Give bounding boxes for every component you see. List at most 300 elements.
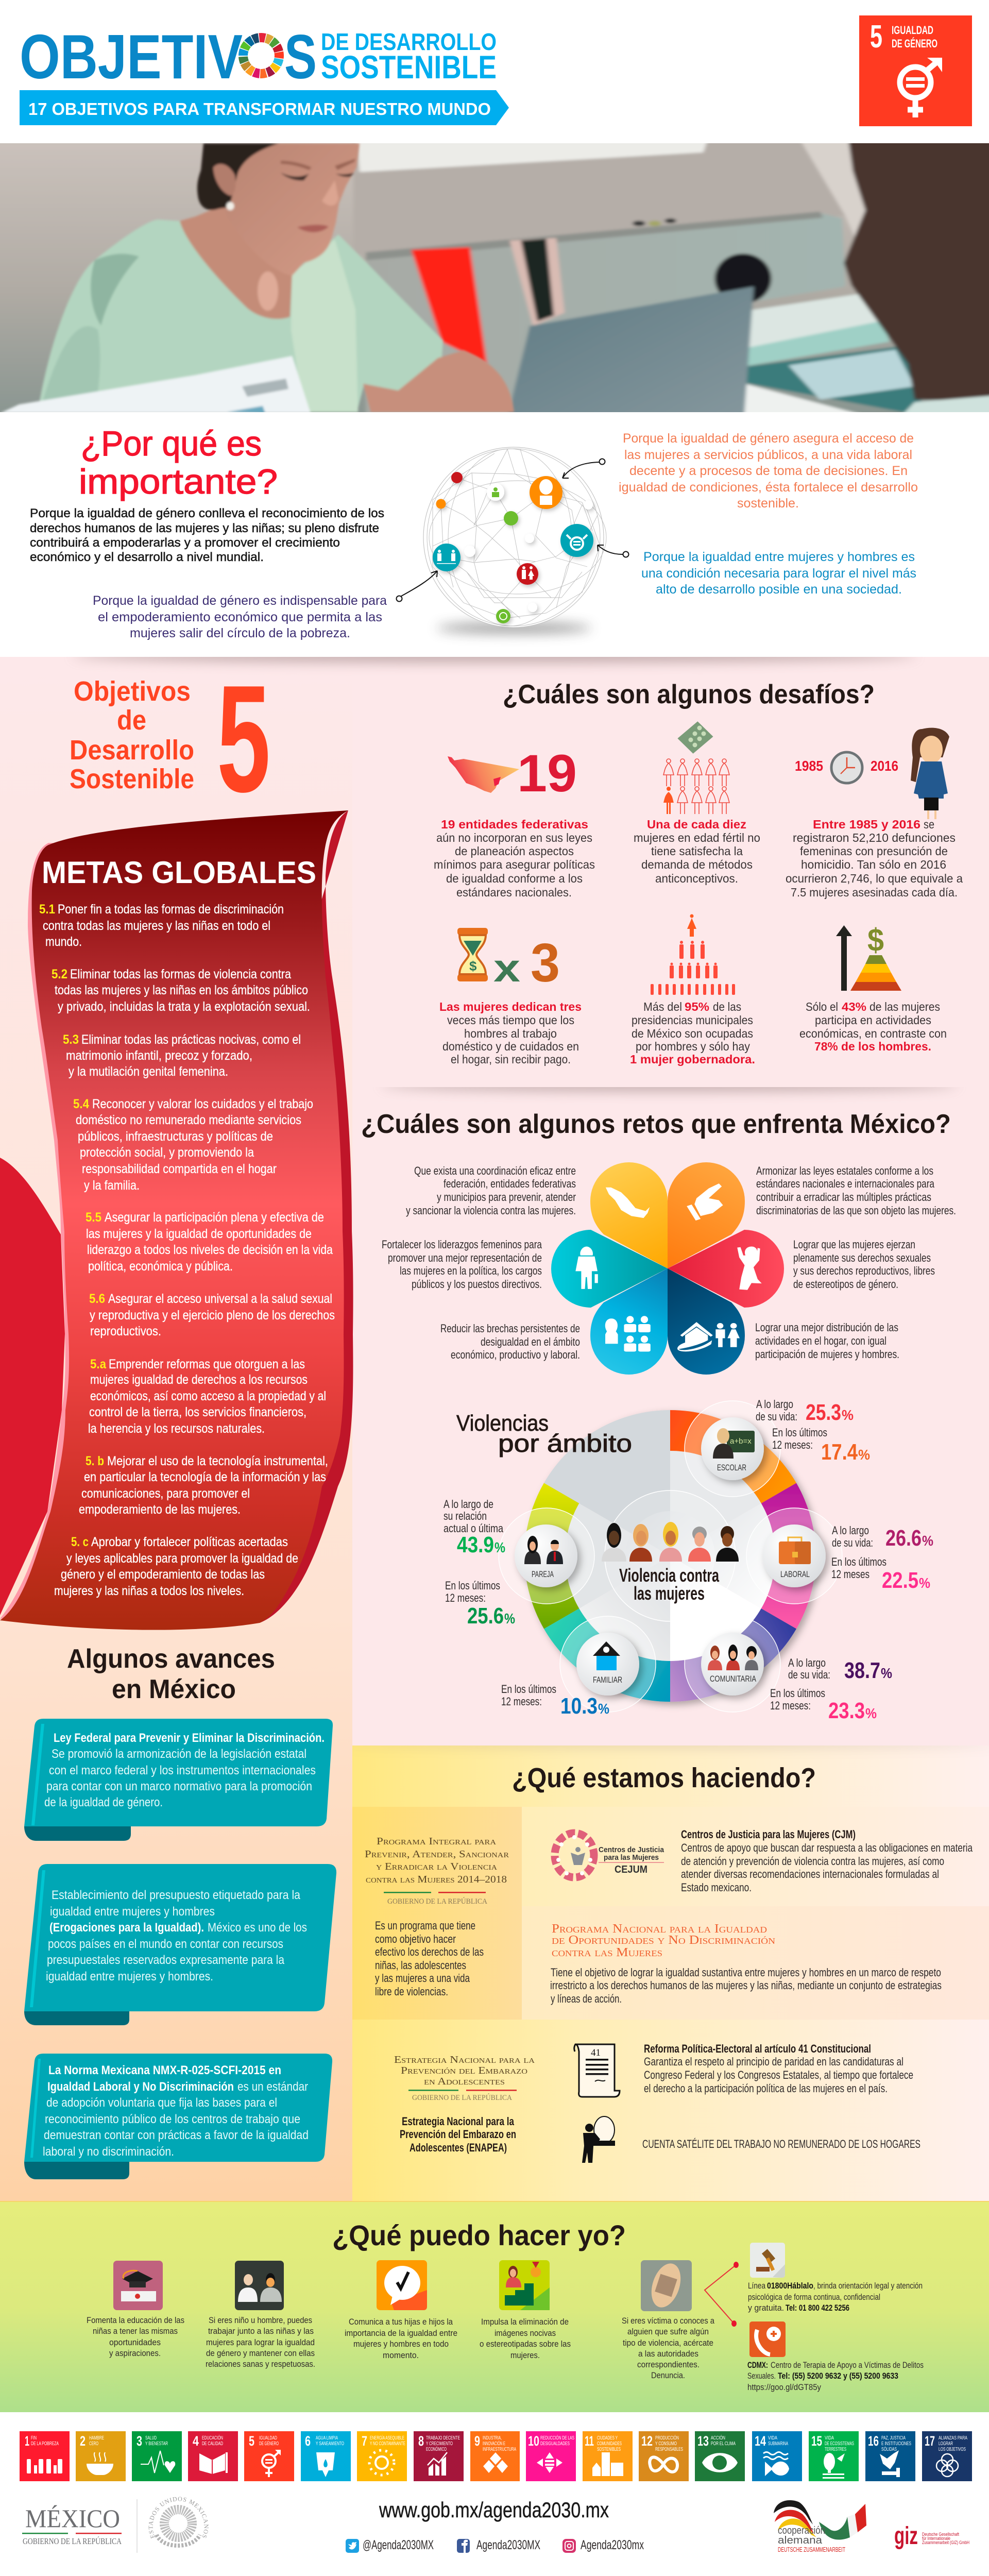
text: meta 5.1: contra todas las mujeres y las niñas en todo el (43, 919, 270, 933)
panel: Norma Mexicana: La Norma Mexicana NMX-R-025-SCFI-2015 en (48, 2063, 281, 2077)
text: meta 5.a: Emprender reformas que otorguen a las (109, 1357, 305, 1371)
tile 11 (583, 2431, 633, 2481)
icon: escudo nacional: ESTADOS UNIDOS MEXICANOS (148, 2497, 208, 2539)
tile 4: 4 (193, 2433, 199, 2449)
tile 1: 1 (25, 2433, 29, 2449)
text: entre 1985 y 2016: femeninas con presunción de (800, 844, 948, 858)
text: entre 1985 y 2016: Entre 1985 y 2016 (813, 818, 920, 831)
section: ¿Qué puedo hacer yo? (0, 2201, 989, 2412)
node: COMUNITARIA (685, 1616, 780, 1712)
tile 11: 11 (585, 2433, 594, 2449)
arrow: purple callout (397, 571, 437, 602)
text: meta 5.3: matrimonio infantil, precoz y forzado, (66, 1048, 252, 1063)
text: una de cada diez: Una de cada diez (647, 818, 746, 831)
text: fomenta educación: y aspiraciones. (109, 2348, 161, 2358)
text: brechas persistentes: económico, productivo y laboral. (451, 1348, 580, 1361)
tile 14: VIDA (768, 2435, 777, 2441)
text: comunica: importancia de la igualdad entre (345, 2328, 457, 2338)
text: liderazgos femeninos: públicos y los puestos directivos. (412, 1278, 542, 1291)
text block: acceso a servicios: las mujeres a servicios públicos, a una vida laboral (624, 448, 912, 462)
logo: cooperación alemana: cooperación (778, 2525, 825, 2536)
text: línea 01800: 01800Háblalo (767, 2281, 813, 2291)
icon: reloj de arena x 3: $ (469, 958, 477, 974)
text: 43% de las mujeres (799, 1000, 947, 1053)
text: armonizar leyes: estándares nacionales e internacionales para (756, 1177, 935, 1190)
tile 8: Y CRECIMIENTO (426, 2441, 453, 2447)
text block: acceso a servicios: sostenible. (737, 496, 799, 511)
tile 14: SUBMARINA (768, 2441, 788, 2447)
stats: laboral: A lo largo (832, 1524, 869, 1537)
panel: programa integral: efectivo los derechos de las (375, 1945, 484, 1958)
panel: Ley Federal: de la igualdad de género. (44, 1795, 163, 1809)
tile 5 (244, 2431, 294, 2481)
text: si eres víctima (622, 2316, 714, 2380)
text: programa nacional igualdad: y líneas de acción. (551, 1992, 622, 2005)
text: meta 5.5: liderazgo a todos los niveles de decisión en la vida (87, 1243, 333, 1257)
text: meta 5.6: y reproductiva y el ejercicio pleno de los derechos (90, 1308, 335, 1323)
icon: reloj de arena x 3 (457, 928, 560, 993)
heading: retos: ¿Cuáles son algunos retos que enfrenta México? (361, 1109, 951, 1139)
heading: violencias por ámbito: Violencias (456, 1411, 549, 1436)
panel: Erogaciones para la Igualdad: (Erogaciones para la Igualdad). (49, 1921, 204, 1935)
tile 9: 9 (474, 2433, 480, 2449)
text: 95% presidencias municipales (630, 1000, 755, 1066)
icon: mazo (750, 2243, 785, 2278)
central circle (605, 1490, 736, 1621)
text: programa nacional igualdad: de Oportunidades y No Discriminación (552, 1934, 775, 1947)
stats: escolar: % (858, 1447, 870, 1463)
text: meta 5.2: todas las mujeres y las niñas en los ámbitos público (55, 983, 308, 997)
panel: programa integral: GOBIERNO DE LA REPÚBLICA (387, 1897, 487, 1906)
icon: pergamino artículo 41 (574, 2044, 620, 2097)
text: 43% de las mujeres: participa en actividades (815, 1013, 931, 1027)
icon: logo CEJUM: para las Mujeres (604, 1853, 659, 1862)
icon: reloj de arena x 3: 3 (531, 933, 560, 993)
text: liderazgos femeninos: Fortalecer los liderazgos femeninos para (382, 1238, 542, 1251)
text: fomenta educación: Fomenta la educación de las (87, 2315, 184, 2325)
icon: logo CEJUM: CEJUM (615, 1864, 647, 1875)
chart: rueda de violencia (499, 1401, 842, 1712)
tile 10: DESIGUALDADES (540, 2441, 570, 2447)
tile 16: E INSTITUCIONES (881, 2441, 911, 2447)
text: línea 01800: , brinda orientación legal y atención (813, 2281, 923, 2291)
text: meta 5.2: Eliminar todas las formas de violencia contra (70, 967, 291, 981)
text: una de cada diez: demanda de métodos (641, 858, 753, 871)
tile 13 (695, 2431, 745, 2481)
text: meta 5.2 (52, 967, 310, 1014)
panel: programa integral: Prevenir, Atender, Sancionar (365, 1849, 509, 1860)
banner: 17 objetivos: 17 OBJETIVOS PARA TRANSFORMAR NUESTRO MUNDO (28, 99, 491, 118)
heading: Algunos avances en México (67, 1644, 275, 1704)
text: 19 entidades: aún no incorporan en sus leyes (436, 831, 592, 844)
tile 2 (76, 2431, 126, 2481)
text block: reconocimiento de derechos (30, 506, 384, 564)
icon: mapa de México con 19: 19 (517, 744, 577, 803)
text: meta 5.b (79, 1454, 328, 1517)
tile 16: SÓLIDAS (881, 2446, 897, 2452)
panel: Norma Mexicana: es un estándar (237, 2080, 308, 2094)
stats: comunitaria: % (865, 1705, 877, 1721)
text: centros de justicia: Centros de Justicia para las Mujeres (CJM) (681, 1828, 856, 1841)
panel: Erogaciones para la Igualdad: pocos países en el mundo en contar con recursos (48, 1937, 283, 1951)
text: programa nacional igualdad: Programa Nacional para la Igualdad (552, 1922, 767, 1936)
text: programa nacional igualdad (550, 1922, 942, 2005)
text: derechos sexuales (793, 1238, 935, 1291)
logo: giz: Deutsche Gesellschaft (922, 2532, 959, 2537)
text: si eres víctima: correspondientes. (637, 2360, 700, 2369)
panel: ENAPEA: Estrategia Nacional para la (394, 2054, 535, 2065)
panel: Norma Mexicana: laboral y no discriminación. (43, 2145, 174, 2159)
icon: mujer saltando (737, 1247, 762, 1290)
row: 17 SDG tiles (20, 2431, 972, 2481)
tile 16 (865, 2431, 915, 2481)
text: meta 5.2: y privado, incluidas la trata y la explotación sexual. (58, 999, 310, 1014)
heading: METAS GLOBALES: METAS GLOBALES (42, 855, 316, 890)
text: línea 01800 (748, 2281, 923, 2313)
tile 8 (414, 2431, 464, 2481)
logo: giz (894, 2522, 969, 2550)
text block: acceso a servicios: decente y a procesos de toma de decisiones. En (629, 464, 908, 478)
icon: SDG 5 tile (859, 15, 972, 126)
header: logo and banner (20, 22, 509, 125)
heading: Objetivos de Desarrollo Sostenible 5: 5 (217, 653, 270, 824)
stats: comunitaria (770, 1656, 892, 1723)
panel: ENAPEA: Prevención del Embarazo (401, 2065, 527, 2076)
tile 17: LOGRAR (939, 2441, 953, 2447)
text: 95% presidencias municipales: de las (713, 1000, 741, 1013)
text: 19 entidades: mínimos para asegurar políticas (434, 858, 595, 871)
panel: Norma Mexicana: de adopción voluntaria que fija las bases para el (46, 2096, 277, 2110)
tile 6: AGUA LIMPIA (316, 2435, 338, 2441)
icon: pirámide de personas (651, 914, 735, 995)
stats: laboral: 12 meses (831, 1568, 869, 1581)
heading: Objetivos de Desarrollo Sostenible 5 (70, 653, 270, 824)
panel: programa integral: Es un programa que tiene (375, 1919, 475, 1932)
text: meta 5.b: Mejorar el uso de la tecnología instrumental, (107, 1454, 328, 1468)
stats: laboral: de su vida: (832, 1536, 873, 1549)
text: 43% de las mujeres: 78% de los hombres. (814, 1040, 931, 1053)
text: coordinación eficaz (406, 1164, 576, 1217)
text: meta 5.c: y leyes aplicables para promover la igualdad de (66, 1551, 298, 1566)
icon: reloj de arena x 3: x (493, 946, 520, 990)
panel: Erogaciones para la Igualdad: Establecimiento del presupuesto etiquetado para la (52, 1888, 301, 1902)
panel: Ley Federal: Se promovió la armonización de la legislación estatal (52, 1747, 306, 1761)
icon: SDG colour wheel (236, 30, 286, 81)
tile 9 (470, 2431, 520, 2481)
text: coordinación eficaz: y municipios para prevenir, atender (437, 1191, 576, 1204)
heading: Objetivos de Desarrollo Sostenible 5: Desarrollo (70, 735, 194, 766)
text: meta 5.4: protección social, y promoviendo la (80, 1145, 254, 1160)
tile 13: 13 (697, 2433, 709, 2449)
text: brechas persistentes: desigualdad en el ámbito (481, 1335, 580, 1348)
text: 19 entidades: 19 entidades federativas (441, 818, 588, 831)
text: las mujeres dedican tres (439, 1000, 582, 1066)
text: entre 1985 y 2016 (786, 818, 963, 899)
section: Algunos avances en México (24, 1644, 336, 2179)
logo: giz: giz (894, 2522, 918, 2550)
text: meta 5.6: reproductivos. (90, 1324, 161, 1338)
text: 43% de las mujeres: Sólo el (806, 1000, 838, 1013)
tile 12: PRODUCCIÓN (655, 2434, 679, 2441)
tile 16: 16 (868, 2433, 879, 2449)
tile 15 (809, 2431, 859, 2481)
text: 95% presidencias municipales: 1 mujer gobernadora. (630, 1053, 755, 1066)
text: si eres víctima: tipo de violencia, acércate (623, 2338, 713, 2348)
text: meta 5.6 (89, 1292, 335, 1338)
tile 12: RESPONSABLES (655, 2447, 683, 2452)
arrow: blue callout (598, 545, 628, 557)
tile 10: REDUCCIÓN DE LAS (540, 2434, 574, 2441)
tile 5: IGUALDAD (259, 2435, 277, 2441)
panel: Norma Mexicana: Igualdad Laboral y No Discriminación (47, 2080, 234, 2094)
stats: escolar (756, 1398, 870, 1465)
social: twitter: @Agenda2030MX (363, 2538, 434, 2552)
text: reforma político-electoral: Garantiza el respeto al principio de paridad en las candidaturas al (644, 2055, 903, 2068)
stats: pareja: su relación (444, 1510, 487, 1522)
icon: persona trabajando (582, 2116, 615, 2163)
text: una de cada diez: tiene satisfecha la (651, 844, 743, 858)
text: meta 5.1: mundo. (45, 935, 82, 949)
text: armonizar leyes: contribuir a erradicar las múltiples prácticas (756, 1191, 931, 1204)
heading: Algunos avances en México: en México (112, 1674, 236, 1704)
logo wordmark: Objetivos de Desarrollo Sostenible: OBJETIV (20, 22, 243, 92)
icon: reloj 1985 a 2016 con mujer (795, 728, 949, 819)
icon: mujer de pie (575, 1247, 598, 1289)
stats: pareja: 25.6 (467, 1603, 504, 1629)
tile 5: 5 (249, 2433, 254, 2449)
text: entre 1985 y 2016: registraron 52,210 defunciones (793, 831, 956, 844)
text: liderazgos femeninos (382, 1238, 542, 1291)
icon: mapa de México con 19 (448, 744, 577, 803)
text: meta 5.3: y la mutilación genital femenina. (69, 1064, 228, 1079)
tile 15: 15 (811, 2433, 822, 2449)
panel: programa integral: Programa Integral para (377, 1836, 497, 1847)
icon: reloj 1985 a 2016 con mujer: 2016 (871, 758, 898, 774)
section: ¿Por qué es importante? (30, 424, 918, 640)
text: 19 entidades: estándares nacionales. (456, 886, 572, 899)
text: meta 5.b: comunicaciones, para promover el (81, 1486, 250, 1501)
text: actividades en el hogar: actividades en el hogar, con igual (755, 1334, 886, 1347)
text: impulsa (480, 2317, 571, 2360)
text: trabajar junto: relaciones sanas y respetuosas. (206, 2359, 315, 2369)
text: 95% presidencias municipales: 95% (685, 1000, 709, 1013)
icon: teléfono (749, 2321, 786, 2357)
text: actividades en el hogar: participación de mujeres y hombres. (755, 1348, 899, 1361)
tile 6 (301, 2431, 351, 2481)
panel: programa integral: contra las Mujeres 2014–2018 (366, 1874, 507, 1885)
text: 43% de las mujeres: 43% (842, 1000, 866, 1013)
logo: Gobierno de la República (22, 2499, 138, 2553)
text: armonizar leyes: Armonizar las leyes estatales conforme a los (756, 1164, 933, 1177)
text: liderazgos femeninos: promover una mejor representación de (388, 1251, 542, 1264)
tile 16: PAZ, JUSTICIA (881, 2435, 906, 2441)
text: 19 entidades (434, 818, 595, 899)
text: meta 5.1: 5.1 (39, 902, 55, 917)
panel: Norma Mexicana: reconocimiento público de los centros de trabajo que (45, 2112, 300, 2126)
text: brechas persistentes: Reducir las brechas persistentes de (440, 1322, 580, 1335)
text: meta 5.1 (39, 902, 284, 949)
stats: escolar: 25.3 (806, 1400, 841, 1425)
decorative crescent (0, 1158, 65, 1615)
text: meta 5.4: 5.4 (73, 1097, 89, 1111)
text: meta 5.a: económicos, así como acceso a la propiedad y al (90, 1389, 326, 1403)
logo: Gobierno de la República: MÉXICO (25, 2504, 120, 2533)
text: 95% presidencias municipales: presidencias municipales (632, 1013, 753, 1027)
stats: comunitaria: A lo largo (788, 1656, 826, 1669)
tile 8: 8 (418, 2433, 424, 2449)
social: twitter (346, 2538, 434, 2553)
tile 4: DE CALIDAD (202, 2441, 223, 2447)
icon: network globe (423, 447, 606, 633)
text block: acceso a servicios: Porque la igualdad de género asegura el acceso de (623, 431, 914, 446)
text: 43% de las mujeres: de las mujeres (869, 1000, 940, 1013)
tile 1: DE LA POBREZA (31, 2441, 59, 2447)
heading: violencias por ámbito: por ámbito (498, 1430, 632, 1458)
text block: nivel más alto de desarrollo: Porque la igualdad entre mujeres y hombres es (643, 550, 915, 564)
tile 12: 12 (641, 2433, 653, 2449)
text: si eres víctima: Denuncia. (651, 2370, 685, 2380)
text: meta 5.4: públicos, infraestructuras y políticas de (78, 1129, 273, 1144)
stats: escolar: 12 meses: (772, 1438, 813, 1451)
text: meta 5.2: 5.2 (52, 967, 67, 981)
panel: Erogaciones para la Igualdad: México es uno de los (208, 1921, 307, 1935)
text: trabajar junto: Si eres niño u hombre, puedes (209, 2315, 312, 2325)
text: coordinación eficaz: Que exista una coordinación eficaz entre (414, 1164, 576, 1177)
icon: educación (113, 2261, 163, 2310)
text block: empoderamiento económico (93, 594, 387, 640)
tile 6: Y SANEAMIENTO (316, 2441, 344, 2447)
icon: reloj 1985 a 2016 con mujer: 1985 (795, 758, 823, 774)
text block: nivel más alto de desarrollo: alto de desarrollo posible en una sociedad. (656, 582, 902, 597)
heading: desafíos: ¿Cuáles son algunos desafíos? (503, 680, 875, 709)
label: violencia contra las mujeres: las mujeres (634, 1583, 705, 1604)
logo wordmark: Objetivos de Desarrollo Sostenible: SOSTENIBLE (321, 49, 497, 86)
text: CDMX: Tel: (55) 5200 9632 y (55) 5200 9633 (778, 2371, 898, 2381)
stats: comunitaria: 23.3 (828, 1698, 865, 1723)
panel: Erogaciones para la Igualdad: igualdad entre mujeres y hombres. (46, 1970, 213, 1984)
text: si eres víctima: alguien que sufre algún (627, 2327, 709, 2336)
tile 9: INFRAESTRUCTURA (483, 2447, 516, 2452)
text: 95% presidencias municipales: Más del (643, 1000, 682, 1013)
stats: pareja: En los últimos (445, 1579, 500, 1592)
text: comunica: mujeres y hombres en todo (353, 2339, 449, 2349)
text: reforma político-electoral: Reforma Política-Electoral al artículo 41 Constitucional (644, 2042, 871, 2055)
stats: comunitaria: de su vida: (788, 1668, 830, 1681)
text: CDMX: CDMX: (747, 2360, 768, 2370)
text: 19 entidades: de planeación aspectos (455, 844, 574, 858)
tile 10 (526, 2431, 576, 2481)
tile 5: DE GÉNERO (259, 2440, 279, 2447)
logo: cooperación alemana: DEUTSCHE ZUSAMMENARBEIT (778, 2546, 845, 2553)
node: LABORAL: LABORAL (780, 1569, 810, 1579)
icon: mapa (606, 1188, 650, 1218)
stats: escolar: En los últimos (772, 1426, 827, 1439)
node: PAREJA: PAREJA (532, 1569, 554, 1579)
panel: programa integral: niñas, las adolescentes (375, 1959, 466, 1972)
stats: laboral (831, 1524, 933, 1593)
panel: Erogaciones para la Igualdad: igualdad entre mujeres y hombres (50, 1905, 215, 1919)
tile 7: Y NO CONTAMINANTE (370, 2441, 405, 2447)
text: brechas persistentes (440, 1322, 580, 1361)
text: meta 5.1: Poner fin a todas las formas de discriminación (58, 902, 284, 917)
text block: nivel más alto de desarrollo: una condición necesaria para lograr el nivel más (641, 566, 916, 581)
tile 11: COMUNIDADES (597, 2441, 622, 2447)
text: las mujeres dedican tres: veces más tiempo que los (447, 1013, 574, 1027)
text: trabajar junto: trabajar junto a las niñas y las (208, 2326, 314, 2336)
panel: Ley Federal: con el marco federal y los instrumentos internacionales (49, 1764, 316, 1777)
panel: ENAPEA (394, 2054, 535, 2154)
tile 13: ACCIÓN (711, 2434, 725, 2441)
tile 15: VIDA (825, 2435, 834, 2441)
arrow: orange callout (562, 459, 605, 478)
text block: acceso a servicios (619, 431, 918, 511)
text: derechos sexuales: plenamente sus derechos sexuales (793, 1251, 931, 1264)
tile 11: SOSTENIBLES (597, 2447, 621, 2452)
section: violencias por ámbito (444, 1398, 933, 1723)
text: trabajar junto: de género y mantener con ellas (206, 2348, 315, 2358)
tile 17 (922, 2431, 972, 2481)
text: meta 5.3: Eliminar todas las prácticas nocivas, como el (81, 1032, 301, 1047)
text: meta 5.5: política, económica y pública. (88, 1259, 233, 1274)
stats: pareja: A lo largo de (444, 1498, 493, 1511)
tile 7: ENERGÍA ASEQUIBLE (370, 2434, 404, 2441)
icon: SDG 5 tile: 5 (870, 19, 882, 55)
text: centros de justicia (681, 1828, 973, 1894)
tile 3: 3 (137, 2433, 142, 2449)
heading: violencias por ámbito (456, 1411, 632, 1458)
icon: anticonceptivos y figuras de mujeres (663, 719, 729, 814)
tile 17: ALIANZAS PARA (939, 2435, 967, 2441)
text: derechos sexuales: y sus derechos reproductivos, libres (793, 1264, 935, 1277)
tile 12: Y CONSUMO (655, 2441, 677, 2447)
text: meta 5.a: mujeres igualdad de derechos a los recursos (90, 1372, 308, 1387)
text: impulsa: o estereotipadas sobre las (480, 2339, 571, 2349)
panel: metas globales ribbon (0, 810, 353, 1630)
logo: cooperación alemana (774, 2500, 866, 2553)
text: entre 1985 y 2016: 7.5 mujeres asesinadas cada día. (791, 886, 958, 899)
text: meta 5.4: responsabilidad compartida en el hogar (82, 1162, 277, 1176)
photo: woman working at a laptop (0, 139, 989, 415)
text: meta 5.4: doméstico no remunerado mediante servicios (76, 1113, 301, 1127)
node: ESCOLAR: ESCOLAR (717, 1463, 746, 1472)
text: las mujeres dedican tres: Las mujeres dedican tres (439, 1000, 582, 1013)
text: meta 5.a: control de la tierra, los servicios financieros, (89, 1405, 306, 1419)
text: comunica: Comunica a tus hijas e hijos la (349, 2317, 453, 2327)
text block: empoderamiento económico: Porque la igualdad de género es indispensable para (93, 594, 387, 608)
tile 8: TRABAJO DECENTE (426, 2435, 460, 2441)
text: una de cada diez (634, 818, 760, 885)
text: derechos sexuales: Lograr que las mujeres ejerzan (793, 1238, 915, 1251)
text: las mujeres dedican tres: hombres al trabajo (464, 1027, 557, 1040)
tile 1 (20, 2431, 70, 2481)
icon: logo CEJUM (555, 1833, 664, 1877)
text: meta 5.4: Reconocer y valorar los cuidados y el trabajo (92, 1097, 313, 1111)
icon: SDG 5 tile: IGUALDAD (892, 24, 933, 37)
tile 7 (357, 2431, 407, 2481)
text: sitio web: www.gob.mx/agenda2030.mx (379, 2498, 609, 2522)
section: ¿Qué estamos haciendo? (365, 1762, 973, 2163)
tile 3: Y BIENESTAR (145, 2441, 168, 2447)
stats: comunitaria: % (881, 1665, 892, 1681)
tile 17: LOS OBJETIVOS (939, 2447, 966, 2452)
text: CDMX: Centro de Terapia de Apoyo a Víctimas de Delitos (771, 2360, 924, 2370)
text: meta 5.a: 5.a (90, 1357, 107, 1371)
stats: pareja: % (494, 1539, 505, 1555)
icon: SDG 5 tile: DE GÉNERO (892, 37, 937, 50)
stats: escolar: de su vida: (756, 1410, 797, 1423)
tile 14 (752, 2431, 802, 2481)
icon: pergamino artículo 41: 41 (591, 2047, 601, 2058)
